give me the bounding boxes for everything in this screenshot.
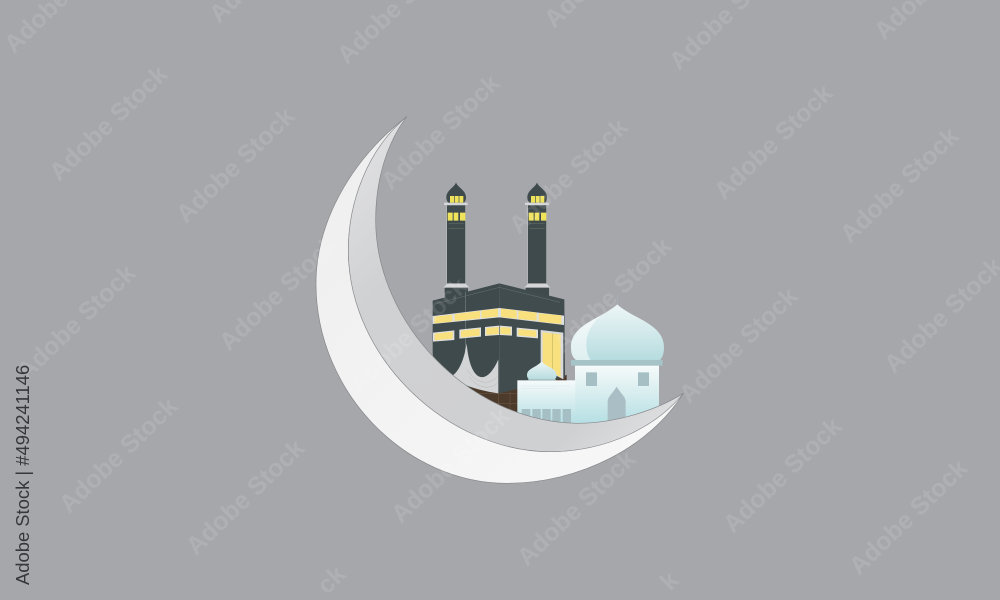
- watermarks: Adobe Stock: [386, 402, 515, 528]
- white outer crescent: [316, 117, 683, 483]
- stock id side label: Adobe Stock | #494241146: [12, 365, 33, 585]
- small dome: [527, 361, 557, 379]
- kaaba left face: [433, 283, 499, 393]
- watermarks: ck: [312, 560, 351, 600]
- side wing: [517, 380, 575, 424]
- right minaret: [524, 182, 550, 300]
- watermarks: Adobe Stock: [844, 454, 973, 580]
- kaaba right face: [499, 283, 565, 393]
- arched door: [608, 387, 626, 425]
- gray inner crescent: [348, 117, 683, 452]
- left minaret: [443, 182, 469, 300]
- watermarks: Adobe Stock: [12, 259, 141, 385]
- kiswah gold band: [433, 308, 564, 325]
- mosque: [517, 295, 664, 425]
- watermarks: Adobe Stock: [504, 113, 633, 239]
- watermarks: Adobe Stock: [548, 232, 677, 358]
- watermarks: Adobe Stock: [214, 230, 343, 356]
- lower gold panels: [433, 326, 538, 342]
- watermarks: Adobe Stock: [709, 79, 838, 205]
- watermarks: Adobe Stock: [376, 69, 505, 195]
- watermarks: Adobe Stock: [718, 412, 847, 538]
- watermarks: k: [655, 566, 684, 596]
- kaaba: [433, 283, 567, 420]
- main mosque wall: [575, 366, 659, 424]
- watermarks: Adobe Stock: [54, 392, 183, 518]
- dome collar: [571, 360, 663, 366]
- watermarks: Adobe Stock: [44, 60, 173, 186]
- illustration: moon and buildings: [316, 117, 683, 483]
- watermarks: Adobe Stock: [171, 102, 300, 228]
- watermarks: Adobe Stock: [674, 282, 803, 408]
- large dome: [571, 304, 664, 360]
- crescent moon: [316, 117, 683, 483]
- brick base: [457, 375, 567, 420]
- watermarks: Adobe Stock: [835, 122, 964, 248]
- watermarks: Adobe Stock: [344, 272, 473, 398]
- watermarks: Adobe Stock: [181, 434, 310, 560]
- kaaba door: [541, 330, 563, 379]
- wall windows: [522, 372, 649, 424]
- watermarks: Adobe Stock: [512, 445, 641, 571]
- white draped cloth: [433, 343, 498, 393]
